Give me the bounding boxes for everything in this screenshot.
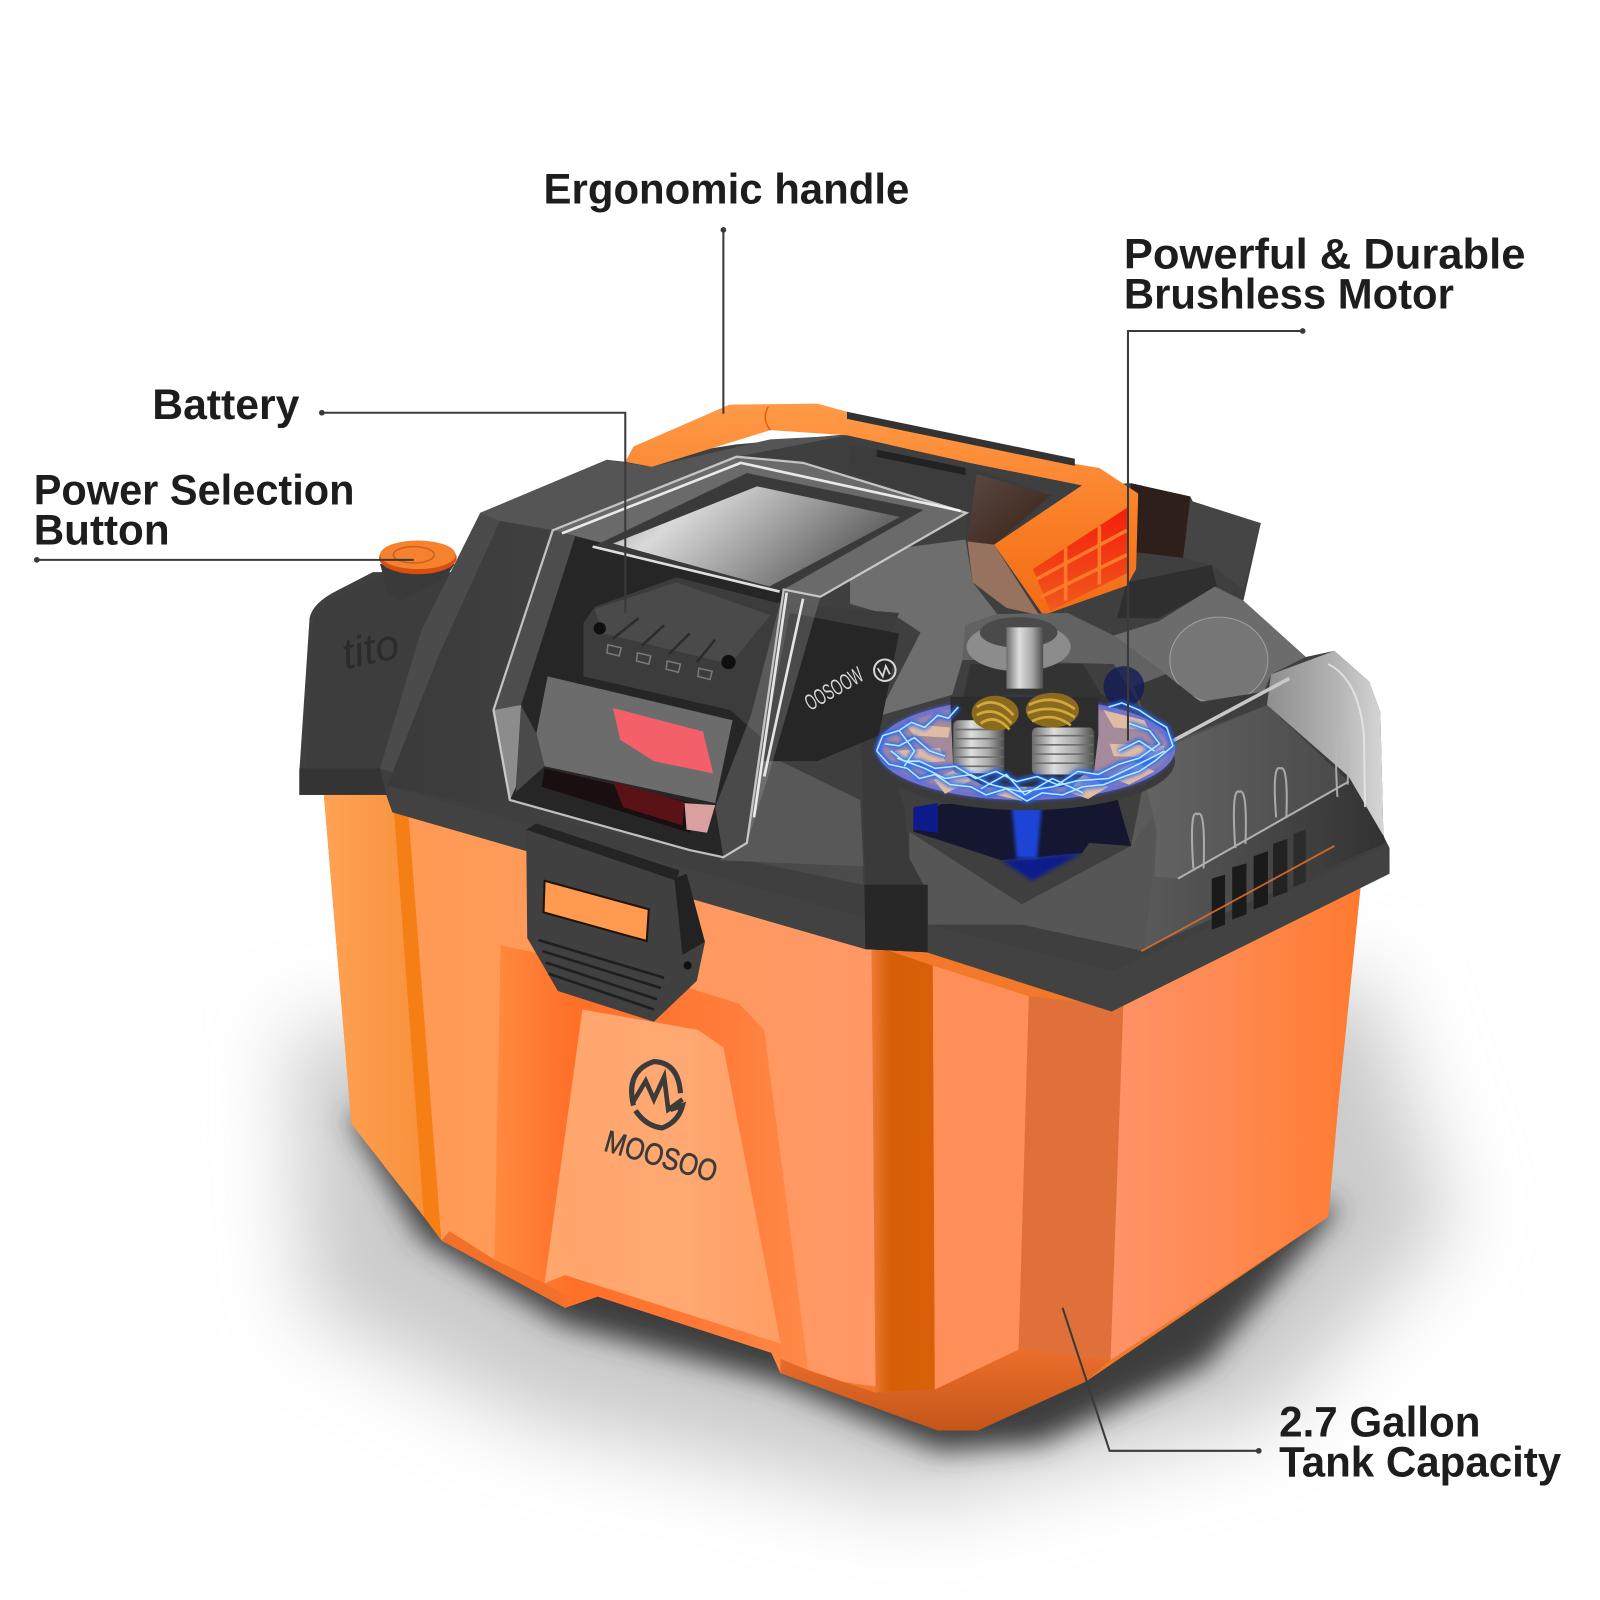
power selection button [379,540,457,601]
electric arcs [877,703,1173,801]
dark base and blue glow [913,664,1146,881]
glass pillars [493,530,575,800]
tank left face [324,795,424,1217]
latch [526,823,705,1022]
tank front face [409,817,876,1386]
rear black grip [1117,483,1261,618]
callout: brushless motor: Powerful & Durable [1124,231,1525,278]
callout: ergonomic handle: Ergonomic handle [544,165,909,212]
medium vertical strip [1019,996,1124,1360]
battery brand panel [761,613,899,761]
vacuum product illustration [299,404,1390,1430]
callout: power selection button: Button [34,507,170,554]
latch ribs [538,940,664,1009]
callout: power selection button [34,467,414,563]
callout: ergonomic handle [544,165,909,414]
bottom chamfer [781,1350,1111,1430]
callout: brushless motor [1124,231,1525,741]
vent slots [1212,817,1324,930]
copper windings and silver cores [950,693,1098,787]
latch orange window [544,881,649,941]
brand logo [601,1062,721,1189]
callout: brushless motor: Brushless Motor [1124,271,1454,318]
lid top face [480,435,848,530]
glass lid top [553,457,967,597]
battery brand panel: OOSOOW [800,662,868,715]
brand logo: MOOSOO [601,1124,721,1189]
right lid surface [1131,705,1385,951]
side cap with embossed mark: tito [337,620,403,679]
brushless motor [877,617,1175,881]
callout: power selection button: Power Selection [34,467,355,514]
right panel [1111,884,1361,1360]
callout: tank capacity: 2.7 Gallon [1279,1399,1480,1446]
battery compartment [493,457,967,857]
battery pack [516,577,899,833]
upper shaft and bearing [967,617,1071,689]
red grid grip [1033,508,1127,611]
lid front band [387,786,1390,1011]
stator ring [877,698,1175,810]
orange tank [324,795,1361,1430]
transparent dome [850,539,1383,951]
dark vertical strip [872,945,935,1393]
lid housing [299,434,1390,1011]
callout: battery [152,381,625,613]
floor shadow [291,981,1451,1502]
red battery release tab [613,708,713,773]
carry handle [625,404,1138,615]
callout: battery: Battery [152,381,300,428]
light vertical panel [933,966,1029,1390]
front lid panel [387,521,863,885]
side cap with embossed mark [299,513,501,795]
callout: tank capacity [1063,1308,1562,1485]
embossed front panel [495,945,808,1373]
callout: tank capacity: Tank Capacity [1279,1438,1562,1485]
glass frame highlights [493,457,967,857]
